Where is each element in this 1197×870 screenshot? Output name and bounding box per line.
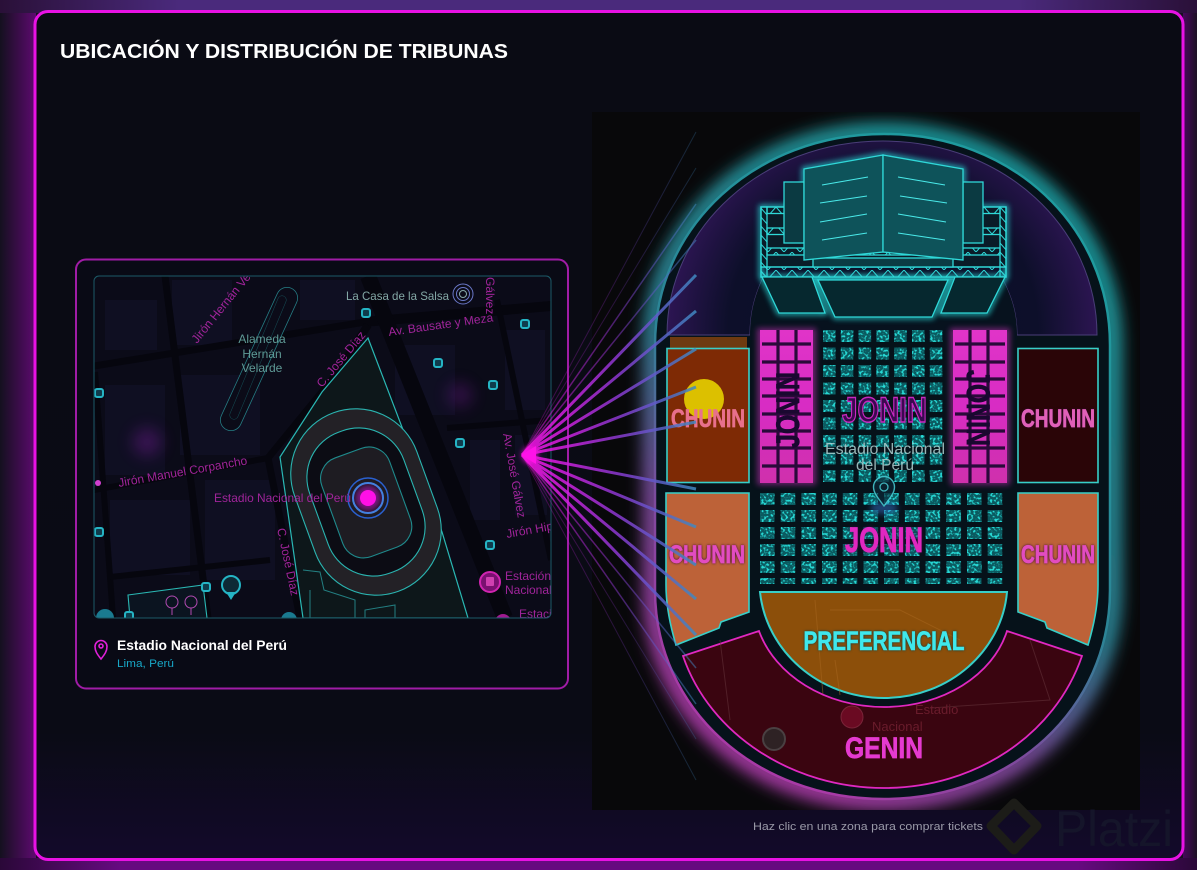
map labels: Velarde <box>242 361 283 375</box>
map <box>94 270 554 630</box>
map border <box>94 276 551 618</box>
panel: location card <box>76 260 568 688</box>
rays from map to stadium <box>522 132 696 780</box>
map labels: Alameda <box>238 332 286 346</box>
icon: La Casa de la Salsa <box>453 284 473 304</box>
purple map glows <box>95 383 472 486</box>
stadium outer ring <box>653 133 1112 800</box>
watermark: Platzi: Platzi <box>1055 801 1173 857</box>
map labels: C. José Díaz <box>274 527 302 597</box>
section: CHUNIN top left: CHUNIN <box>671 405 745 433</box>
icon: tree markers <box>166 596 197 615</box>
map labels: Estación <box>505 569 551 583</box>
panel: stadium seating map <box>592 112 1140 810</box>
stadium rings <box>290 408 442 596</box>
map labels: Jirón Manuel Corpancho <box>117 453 249 490</box>
card title: Estadio Nacional del Perú <box>117 638 287 653</box>
map icons: transit stops <box>95 309 529 620</box>
icon: teal circles at map bottom <box>96 609 510 618</box>
section: JONIN centre lower <box>760 493 1008 584</box>
section: PREFERENCIAL: PREFERENCIAL <box>804 626 964 656</box>
stadium pin glow <box>348 478 388 518</box>
section: JONIN right: JONIN <box>960 370 996 446</box>
icon: card location pin <box>95 640 107 659</box>
stadium name and pin <box>825 441 945 514</box>
section: JONIN right <box>950 328 1010 485</box>
hint text: Haz clic en una zona para comprar tickets <box>753 821 984 833</box>
section: CHUNIN top right: CHUNIN <box>1021 405 1095 433</box>
section: JONIN centre upper <box>823 330 944 483</box>
faint map label: Estadio <box>915 702 958 717</box>
section: CHUNIN top right <box>1018 348 1098 482</box>
icon: metro station <box>480 572 500 592</box>
map labels: Av. José Gálvez <box>500 432 529 519</box>
map labels: La Casa de la Salsa <box>346 289 449 303</box>
map labels: Av. Bausate y Meza <box>387 310 494 339</box>
park: Alameda <box>231 298 287 420</box>
section: JONIN left: JONIN <box>770 372 806 448</box>
section: top arc <box>667 141 1097 335</box>
section: JONIN centre lower: JONIN <box>845 521 923 560</box>
lower buildings outline <box>303 570 395 618</box>
map labels: Nacional <box>505 583 552 597</box>
card subtitle: Lima, Perú <box>117 658 174 670</box>
map labels: Jirón Hernán Ve <box>188 270 254 346</box>
section: CHUNIN top left <box>667 337 749 482</box>
map labels <box>117 270 554 621</box>
map labels: Hernán <box>242 347 282 361</box>
section: PREFERENCIAL <box>760 592 1007 698</box>
section: CHUNIN bottom left <box>666 493 749 645</box>
section: GENIN: Nacional <box>872 719 923 734</box>
map labels: C. José Díaz <box>314 328 368 390</box>
section: JONIN left <box>757 328 816 485</box>
section: CHUNIN bottom right: CHUNIN <box>1021 541 1095 569</box>
section: JONIN centre upper: JONIN <box>842 391 927 430</box>
section: GENIN: GENIN <box>845 732 923 765</box>
section: CHUNIN bottom right <box>1018 493 1098 645</box>
yellow marker <box>684 379 724 419</box>
section: CHUNIN bottom left: CHUNIN <box>669 541 745 569</box>
section: GENIN <box>683 631 1082 788</box>
map labels: Jirón Hip <box>505 519 554 541</box>
stadium name and pin: del Perú <box>856 457 914 474</box>
icon: school pin <box>222 576 240 600</box>
map labels: Estadio Nacional del Perú <box>214 491 351 505</box>
ray origin glow <box>521 446 538 464</box>
stadium block <box>280 338 468 618</box>
title: UBICACIÓN Y DISTRIBUCIÓN DE TRIBUNAS <box>60 39 508 63</box>
watermark: Platzi <box>991 801 1173 857</box>
roads <box>94 276 551 618</box>
stage <box>761 155 1006 317</box>
bottom-left park <box>128 585 207 618</box>
stadium name and pin: Estadio Nacional <box>825 441 945 458</box>
faint pins <box>841 706 863 728</box>
map labels: Gálvez <box>483 277 497 314</box>
map labels: Estaci <box>519 607 552 621</box>
